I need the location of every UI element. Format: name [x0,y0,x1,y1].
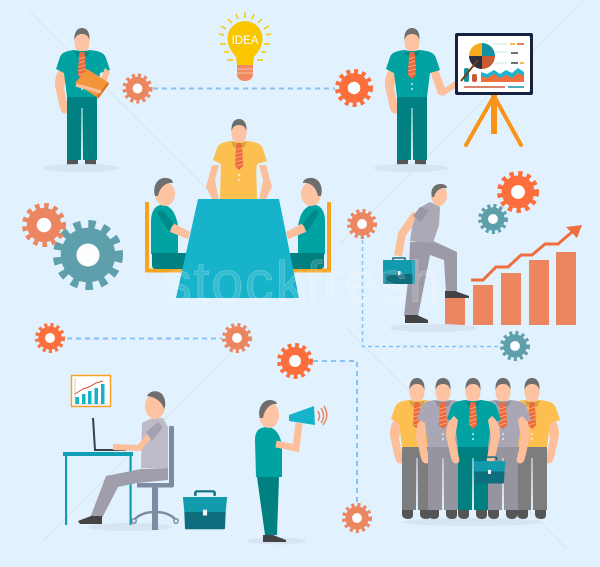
office chair [132,426,178,530]
shadow: presenter [373,164,449,172]
meeting: left seated man [147,178,190,270]
bar chart with rising arrow [445,225,582,325]
icon: megaphone [289,406,327,425]
man with megaphone [255,400,299,542]
gear teal lower right [502,333,528,359]
gear middle right [349,211,375,237]
gear salmon centre [224,325,250,351]
presentation board [455,33,533,145]
dashed connector: megaphone [313,361,357,503]
shadow: desk [88,523,172,531]
person: teal centre [446,378,501,519]
meeting: right seated man [286,178,329,270]
man at desk [78,391,168,524]
climbing man [398,184,469,323]
shadow: person with book [44,164,120,172]
watermark: stockfresh [163,250,441,315]
gear large teal [58,225,118,285]
briefcase on floor [183,491,227,529]
gear top centre [337,71,371,105]
laptop [93,418,126,450]
icon: idea light bulb: IDEA [232,35,259,47]
gear orange left [37,325,63,351]
small chart in frame [72,376,110,406]
person: yellow left [390,378,445,519]
person: grey right [476,378,531,519]
team shadow [402,518,542,526]
team of five [390,378,560,519]
meeting table [176,199,299,298]
shadow: climbing man [389,324,477,332]
dashed connector: middle left [67,338,222,340]
dashed connector: right [362,240,500,346]
gear salmon bottom [344,505,370,531]
desk [63,452,133,525]
gear orange right [500,174,536,210]
gear teal right [480,206,506,232]
gear salmon left [25,206,63,244]
person: grey left [416,378,471,519]
shadow: megaphone man [248,538,306,544]
dashed connector: top [153,88,335,90]
meeting: standing man [206,119,272,260]
person with book [55,28,110,169]
presenter [385,28,460,169]
gear top left [124,75,151,102]
climbing man briefcase [383,258,415,284]
icon: idea light bulb [219,12,271,81]
briefcase in team [474,457,506,484]
gear orange megaphone [279,345,311,377]
person: yellow right [506,378,560,519]
